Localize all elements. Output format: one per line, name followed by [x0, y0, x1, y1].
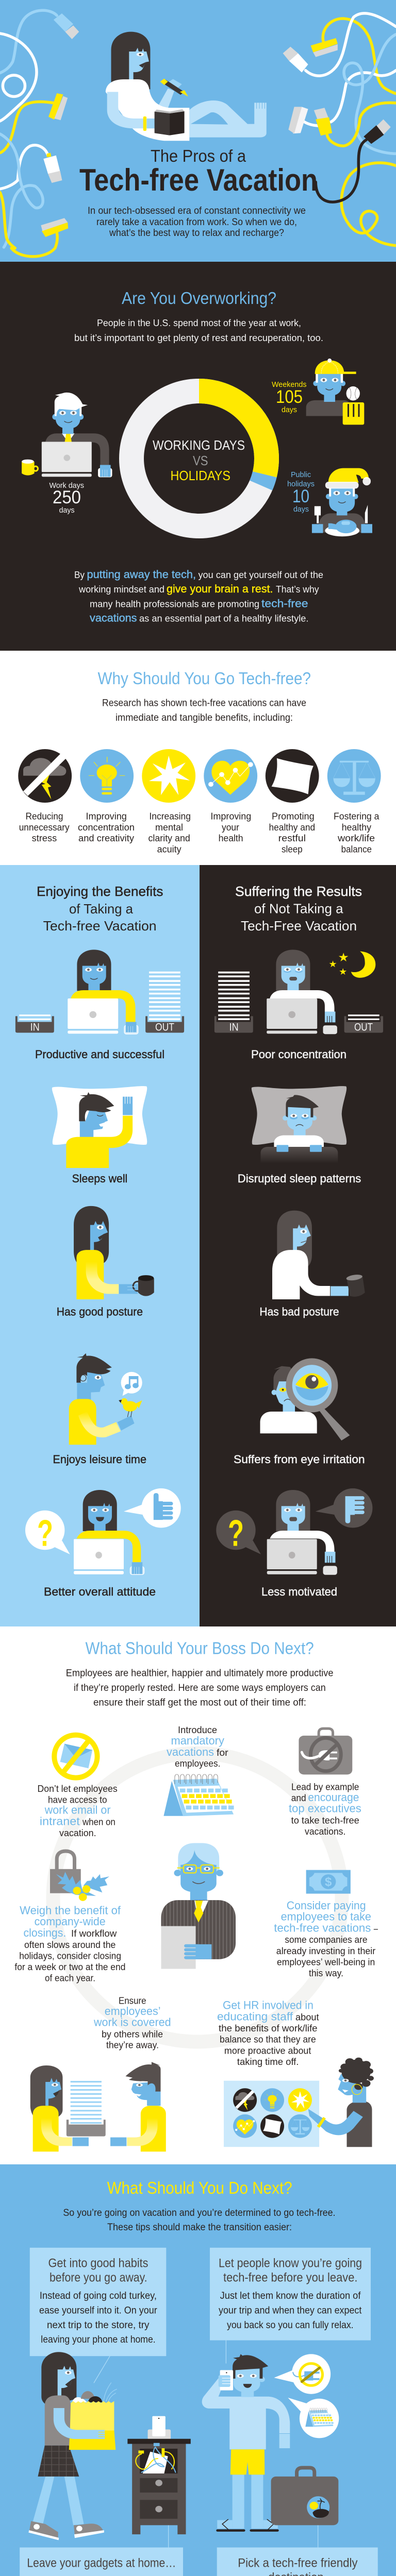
in tray	[15, 1014, 54, 1033]
icon labels: restful	[278, 833, 306, 843]
illustration: office worker with laptop	[22, 393, 112, 477]
callout: leave your gadgets	[20, 2548, 183, 2576]
heading: What Should You Do Next?	[107, 2178, 292, 2197]
illustration: man with baseball glove	[306, 359, 364, 425]
donut chart: working days vs holidays: WORKING DAYS	[153, 437, 245, 453]
icon labels: sleep	[282, 844, 303, 854]
in tray with tall stack	[214, 972, 253, 1033]
caption: Better overall attitude	[44, 1585, 156, 1598]
tip: company-wide closings: closings.	[24, 1926, 66, 1939]
donut chart: working days vs holidays: VS	[193, 453, 208, 468]
icon row: six benefits	[18, 749, 381, 803]
tip: work is covered: they’re away.	[106, 2040, 159, 2050]
illustration: man with holiday meal	[312, 468, 372, 536]
ring behind tips	[53, 1753, 342, 2042]
icon labels: mental	[155, 822, 183, 833]
icon: pillow	[266, 749, 319, 803]
icon labels: Fostering a	[334, 811, 380, 821]
callout: good habits: before you go away.	[50, 2271, 147, 2284]
intro text: if they’re properly rested. Here are some ways employers can	[74, 1683, 326, 1693]
label: work days: Work days	[50, 481, 84, 490]
tip: lead by example: Lead by example	[291, 1782, 359, 1792]
tip: work is covered: by others while	[102, 2029, 163, 2039]
caption: Enjoys leisure time	[53, 1453, 146, 1466]
tip: lead by example: and	[291, 1793, 306, 1803]
icon labels: unnecessary	[19, 822, 70, 833]
icon labels: acuity	[157, 844, 182, 854]
section: why should you go tech-free	[0, 651, 396, 865]
heading: of Not Taking a	[254, 901, 343, 916]
tip: hr involved: balance so that they are	[220, 2035, 316, 2045]
tip: mandatory vacations: mandatory	[171, 1734, 224, 1747]
heading: Why Should You Go Tech-free?	[98, 669, 311, 688]
icon labels: clarity and	[148, 833, 190, 843]
section: are you overworking	[0, 262, 396, 651]
paragraph: putting away the tech: working mindset and	[78, 584, 164, 595]
tray labels	[229, 1021, 373, 1033]
intro text	[88, 206, 306, 239]
callout: good habits: ease yourself into it. On your	[39, 2305, 157, 2316]
tip: work is covered: Ensure	[119, 1996, 146, 2006]
label: weekends: Weekends	[272, 380, 306, 389]
tip: paying employees: employees’ well-being in	[277, 1957, 375, 1967]
callout: tech-free friendly destination: Pick a tech-free friendly	[238, 2556, 358, 2570]
tip: work is covered: work is covered	[93, 2016, 171, 2029]
intro text: These tips should make the transition easier:	[107, 2222, 292, 2233]
tip: paying employees: some companies are	[285, 1935, 367, 1945]
callout: let people know: Just let them know the duration of	[220, 2291, 361, 2301]
intro text	[66, 1668, 334, 1708]
illustration: woman with good posture	[74, 1206, 154, 1299]
tip: mandatory vacations: employees.	[175, 1758, 221, 1769]
subheading	[102, 698, 306, 723]
tip: lead by example: top executives	[289, 1802, 361, 1815]
section: what should your boss do next	[0, 1626, 396, 2164]
subheading: but it’s important to get plenty of rest and recuperation, too.	[74, 333, 323, 343]
illustration: productive woman at laptop	[15, 950, 184, 1034]
illustration: unmotivated woman with speech bubbles	[216, 1488, 372, 1575]
tip: company-wide closings	[14, 1904, 125, 1983]
tray labels	[30, 1021, 174, 1033]
panel: enjoying the benefits	[0, 865, 200, 1626]
tip: hr involved	[217, 1998, 319, 2067]
tip: paying employees: Consider paying	[287, 1899, 366, 1912]
panel: suffering the results	[200, 865, 396, 1626]
illustration: tired woman at laptop	[214, 950, 383, 1034]
tip: lead by example: to take tech-free	[291, 1816, 359, 1826]
icon: mental clarity star	[142, 749, 195, 803]
callout: let people know: your trip and when they can expect	[219, 2305, 362, 2316]
intro text: what’s the best way to relax and recharge?	[109, 228, 284, 239]
illustration: man on phone with speech bubbles	[202, 2341, 339, 2532]
illustration: man with bird enjoying leisure	[69, 1353, 142, 1445]
label: public holidays: 10	[292, 486, 309, 506]
question mark: ?	[228, 1513, 244, 1554]
paragraph: putting away the tech: tech-free	[261, 598, 308, 610]
out tray with tall stack	[145, 972, 184, 1033]
label: work days: days	[59, 506, 75, 515]
tip: paying employees: this way.	[309, 1968, 343, 1978]
heading: Are You Overworking?	[122, 289, 276, 308]
out tray	[344, 1014, 383, 1033]
tray labels: OUT	[155, 1021, 174, 1033]
heading: of Taking a	[69, 901, 134, 917]
tip: company-wide closings: If workflow	[71, 1928, 117, 1939]
subheading: immediate and tangible benefits, including:	[116, 713, 293, 723]
caption: Suffers from eye irritation	[234, 1453, 365, 1466]
paragraph: putting away the tech: putting away the tech,	[87, 569, 196, 581]
paragraph: putting away the tech: give your brain a rest.	[167, 583, 273, 595]
heading: Tech-Free Vacation	[241, 918, 357, 934]
tip: paying employees: –	[374, 1923, 378, 1934]
icon: moon and stars	[329, 952, 375, 978]
illustration: man with magnifying glass over irritated eye	[260, 1358, 350, 1440]
illustration: boss in pinstripe suit	[161, 1843, 236, 1969]
icon labels: Increasing	[149, 811, 191, 821]
tray labels: OUT	[354, 1021, 373, 1033]
callout: let people know	[210, 2248, 371, 2340]
tip: hr involved: the benefits of work/life	[219, 2023, 318, 2033]
tip: work email: when on	[82, 1817, 116, 1827]
icon labels	[19, 811, 380, 854]
caption: Less motivated	[261, 1585, 337, 1598]
illustration: presenter with benefits board	[224, 2058, 374, 2147]
tip: paying employees: employees to take	[281, 1910, 371, 1923]
donut chart: working days vs holidays	[118, 377, 280, 540]
icon: reduced stress	[18, 749, 72, 803]
tip: paying employees: tech-free vacations	[274, 1921, 371, 1934]
intro text: Employees are healthier, happier and ultimately more productive	[66, 1668, 334, 1679]
label: work days	[50, 481, 84, 515]
tip: hr involved: about	[295, 2012, 319, 2023]
icon: locked padlock with holly	[50, 1851, 109, 1901]
icon: no email	[54, 1735, 97, 1778]
intro text: ensure their staff get the most out of their time off:	[93, 1697, 306, 1708]
tip: lead by example: vacations.	[305, 1826, 345, 1837]
tip: paying employees: already investing in their	[276, 1946, 375, 1956]
icon labels: Promoting	[272, 811, 315, 821]
tip: work email: vacation.	[59, 1828, 96, 1838]
heading: Suffering the Results	[235, 884, 362, 899]
paragraph: putting away the tech: as an essential part of a healthy lifestyle.	[139, 613, 308, 623]
caption: Sleeps well	[72, 1172, 127, 1185]
icon labels: Improving	[86, 811, 127, 821]
icon: heart health	[204, 749, 257, 803]
subheading	[74, 318, 323, 343]
subheading: Research has shown tech-free vacations can have	[102, 698, 306, 709]
tip: company-wide closings: for a week or two at the end	[14, 1962, 125, 1972]
illustration: sleepless man in bed	[252, 1086, 346, 1163]
icon labels: your	[222, 822, 239, 833]
illustration: tangled charging cables, left	[0, 10, 79, 257]
icon labels: work/life	[337, 833, 375, 843]
illustration: woman with bad posture	[272, 1211, 365, 1299]
icon: balance scales	[327, 749, 381, 803]
subheading: People in the U.S. spend most of the year at work,	[97, 318, 301, 328]
illustration: tangled charging cables, right	[283, 13, 396, 246]
icon labels: and creativity	[78, 833, 134, 843]
tip: work email: work email or	[44, 1804, 110, 1817]
heading	[37, 884, 163, 934]
callout: good habits	[30, 2248, 166, 2356]
paragraph: putting away the tech	[74, 569, 323, 624]
tip: company-wide closings: often slows around the	[24, 1940, 116, 1950]
callout: good habits: Instead of going cold turkey,	[40, 2291, 157, 2301]
tip: company-wide closings: company-wide	[35, 1915, 106, 1928]
callout: good habits: Get into good habits	[48, 2256, 148, 2270]
paragraph: putting away the tech: By	[74, 570, 85, 580]
callout: let people know: tech-free before you leave.	[223, 2271, 358, 2284]
caption: Has good posture	[57, 1306, 143, 1318]
label: public holidays: days	[293, 505, 309, 514]
caption: Disrupted sleep patterns	[238, 1172, 361, 1185]
tray labels: IN	[229, 1021, 239, 1033]
tip: work is covered: employees’	[105, 2005, 161, 2018]
title: The Pros of a	[151, 146, 246, 165]
icon labels: healthy and	[269, 822, 315, 833]
tip: work email: intranet	[40, 1815, 80, 1828]
intro text: rarely take a vacation from work. So when we do,	[96, 217, 297, 228]
icon: briefcase with unplugged sign	[299, 1728, 352, 1774]
illustration: woman carrying grocery bag	[28, 2352, 117, 2540]
callout: let people know: Let people know you’re going	[219, 2256, 362, 2270]
icon: dollar bill	[306, 1870, 351, 1894]
icon labels: health	[219, 833, 243, 843]
heading: Tech-free Vacation	[43, 918, 157, 934]
paragraph: putting away the tech: vacations	[90, 612, 137, 624]
label: weekends	[272, 380, 306, 414]
donut chart: working days vs holidays: HOLIDAYS	[170, 468, 230, 483]
icon labels: Reducing	[26, 811, 63, 821]
section: what should you do next	[0, 2164, 396, 2576]
label: public holidays: holidays	[287, 480, 315, 488]
heading: What Should Your Boss Do Next?	[86, 1638, 314, 1658]
tip: mandatory vacations	[167, 1725, 228, 1769]
paragraph: putting away the tech: you can get yourself out of the	[198, 570, 323, 580]
tip: company-wide closings: Weigh the benefit of	[20, 1904, 121, 1917]
tip: hr involved: taking time off.	[237, 2057, 299, 2067]
tip: mandatory vacations: vacations	[167, 1745, 214, 1758]
caption: Has bad posture	[259, 1306, 339, 1318]
illustration: suitcase with island sticker	[271, 2468, 338, 2548]
icon labels: stress	[32, 833, 57, 843]
title: Tech-free Vacation	[79, 163, 318, 197]
illustration: woman reading a book	[106, 32, 267, 141]
icon labels: concentration	[78, 822, 135, 833]
intro text: So you’re going on vacation and you’re determined to go tech-free.	[63, 2208, 335, 2218]
tip: hr involved: Get HR involved in	[223, 1998, 314, 2011]
tip: mandatory vacations: Introduce	[178, 1725, 217, 1735]
tip: lead by example: encourage	[308, 1791, 359, 1804]
caption: Productive and successful	[35, 1048, 164, 1061]
illustration: nightstand with gadgets in drawer	[127, 2416, 191, 2548]
intro text: In our tech-obsessed era of constant connectivity we	[88, 206, 306, 216]
heading: Enjoying the Benefits	[37, 884, 163, 899]
label: work days: 250	[53, 487, 81, 507]
tip: work email: Don’t let employees	[37, 1784, 118, 1794]
tip: work email: have access to	[48, 1795, 107, 1805]
tip: company-wide closings: of each year.	[45, 1973, 95, 1983]
question mark: ?	[37, 1513, 53, 1554]
icon: light bulb	[80, 749, 134, 803]
tip: company-wide closings: holidays, consider closing	[19, 1951, 121, 1961]
icon labels: balance	[341, 844, 372, 854]
icon: dollar bill: $	[325, 1875, 332, 1889]
tip: work is covered	[93, 1996, 171, 2050]
callout: tech-free friendly destination	[217, 2548, 378, 2576]
tip: work email	[37, 1784, 118, 1838]
illustration: two colleagues handing over work	[30, 2062, 166, 2151]
paragraph: putting away the tech: many health professionals are promoting	[90, 599, 259, 609]
tray labels: IN	[30, 1021, 40, 1033]
title	[79, 146, 318, 197]
callout: let people know: you back so you can fully relax.	[227, 2320, 354, 2331]
label: weekends: days	[282, 405, 297, 414]
illustration: man sleeping on pillow	[52, 1086, 147, 1168]
caption: Poor concentration	[251, 1048, 346, 1061]
illustration: woman with good attitude and speech bubbles	[25, 1488, 181, 1574]
section: hero	[0, 0, 396, 262]
tip: mandatory vacations: for	[217, 1748, 228, 1758]
label: public holidays: Public	[291, 470, 311, 479]
callout: leave your gadgets: Leave your gadgets at home…	[27, 2556, 176, 2570]
tip: lead by example	[289, 1782, 361, 1837]
label: public holidays	[287, 470, 315, 514]
icon: calendar	[163, 1774, 234, 1816]
icon labels: Improving	[210, 811, 251, 821]
label: weekends: 105	[276, 387, 303, 407]
tip: hr involved: educating staff	[217, 2010, 293, 2023]
callout: good habits: leaving your phone at home.	[41, 2334, 156, 2345]
tip: paying employees	[274, 1899, 378, 1978]
paragraph: putting away the tech: That’s why	[276, 584, 319, 595]
tip: hr involved: more proactive about	[224, 2045, 311, 2056]
intro text	[63, 2208, 335, 2233]
icon labels: healthy	[342, 822, 371, 833]
callout: good habits: next trip to the store, try	[47, 2320, 150, 2331]
heading	[235, 884, 362, 934]
